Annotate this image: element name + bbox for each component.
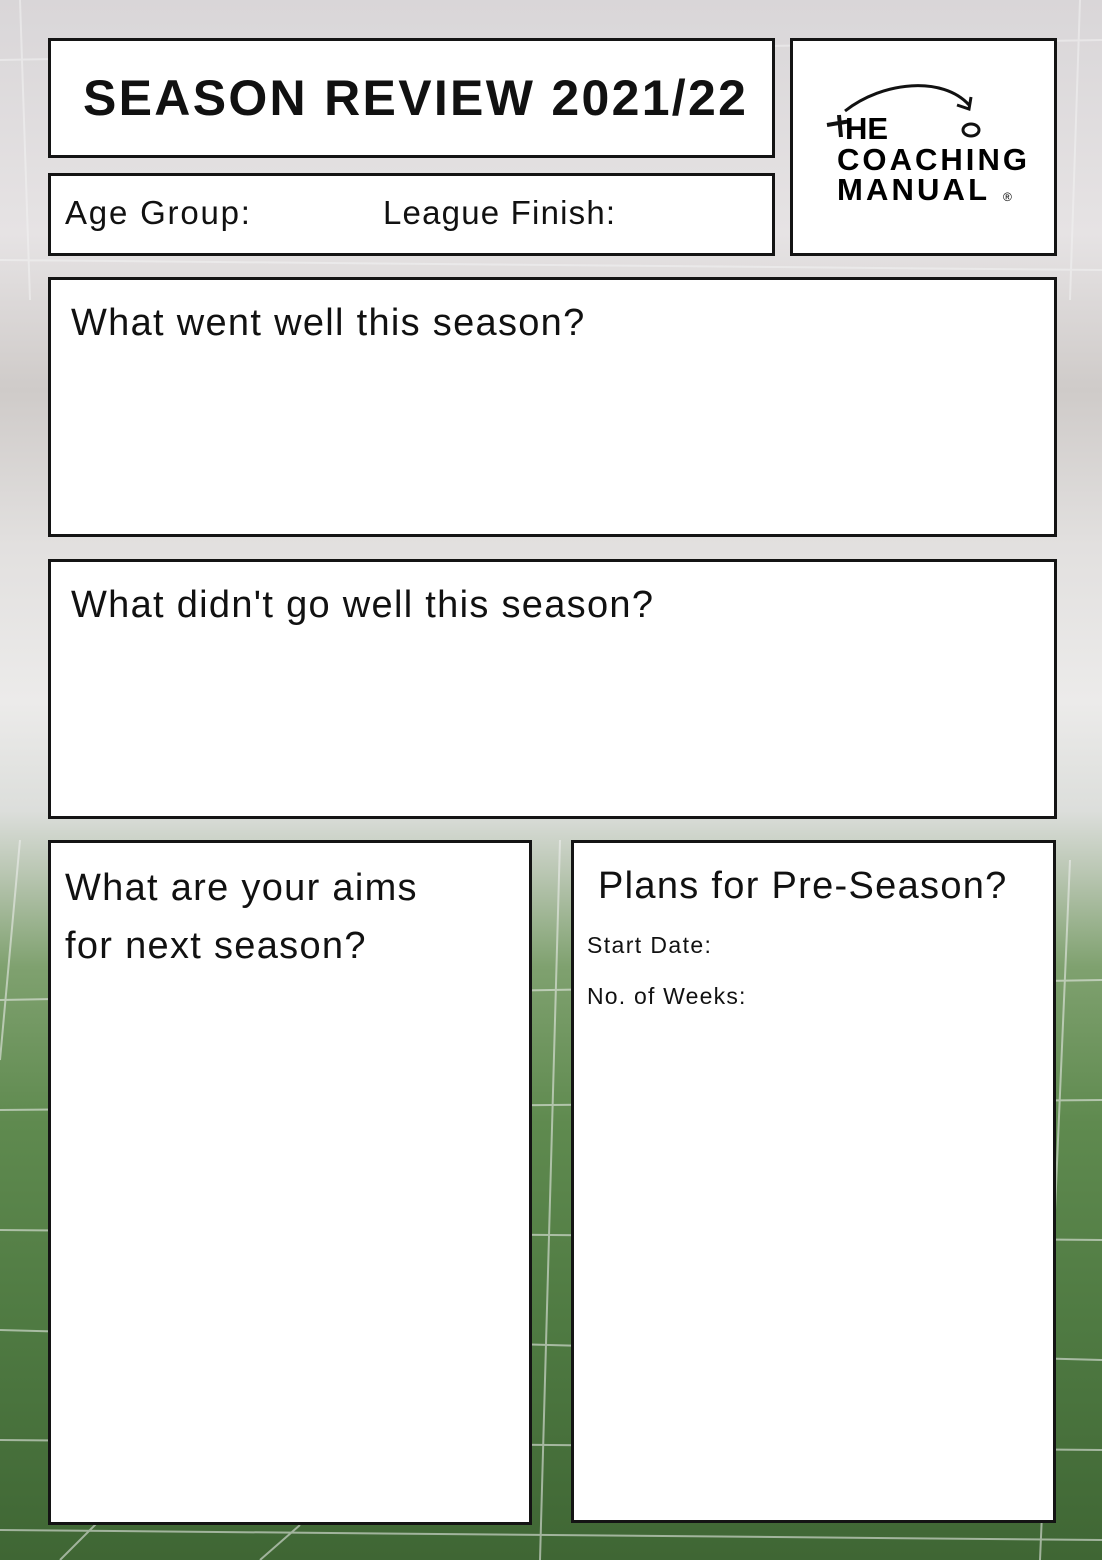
heading — [65, 867, 418, 967]
label: number of weeks: No. of Weeks: — [587, 983, 747, 1009]
logo: COACHING — [837, 142, 1027, 177]
heading: Plans for Pre-Season? — [598, 865, 1008, 907]
heading: What didn't go well this season? — [71, 584, 654, 626]
panel: what went well — [48, 277, 1057, 537]
heading: What are your aims — [65, 867, 418, 909]
panel: plans for pre-season — [571, 840, 1056, 1523]
panel: what didn't go well — [48, 559, 1057, 819]
logo: HE — [845, 111, 888, 146]
panel: aims for next season — [48, 840, 532, 1525]
label: start date: Start Date: — [587, 932, 712, 958]
heading: What went well this season? — [71, 302, 586, 344]
info box: age group and league finish — [48, 173, 775, 256]
heading: for next season? — [65, 925, 367, 967]
label: age group: Age Group: — [65, 194, 252, 231]
logo: ® — [1003, 190, 1012, 204]
title: SEASON REVIEW 2021/22 — [83, 70, 748, 126]
label: league finish: League Finish: — [383, 194, 616, 231]
logo box — [790, 38, 1057, 256]
logo — [826, 84, 1027, 207]
logo: MANUAL — [837, 172, 987, 207]
title box — [48, 38, 775, 158]
